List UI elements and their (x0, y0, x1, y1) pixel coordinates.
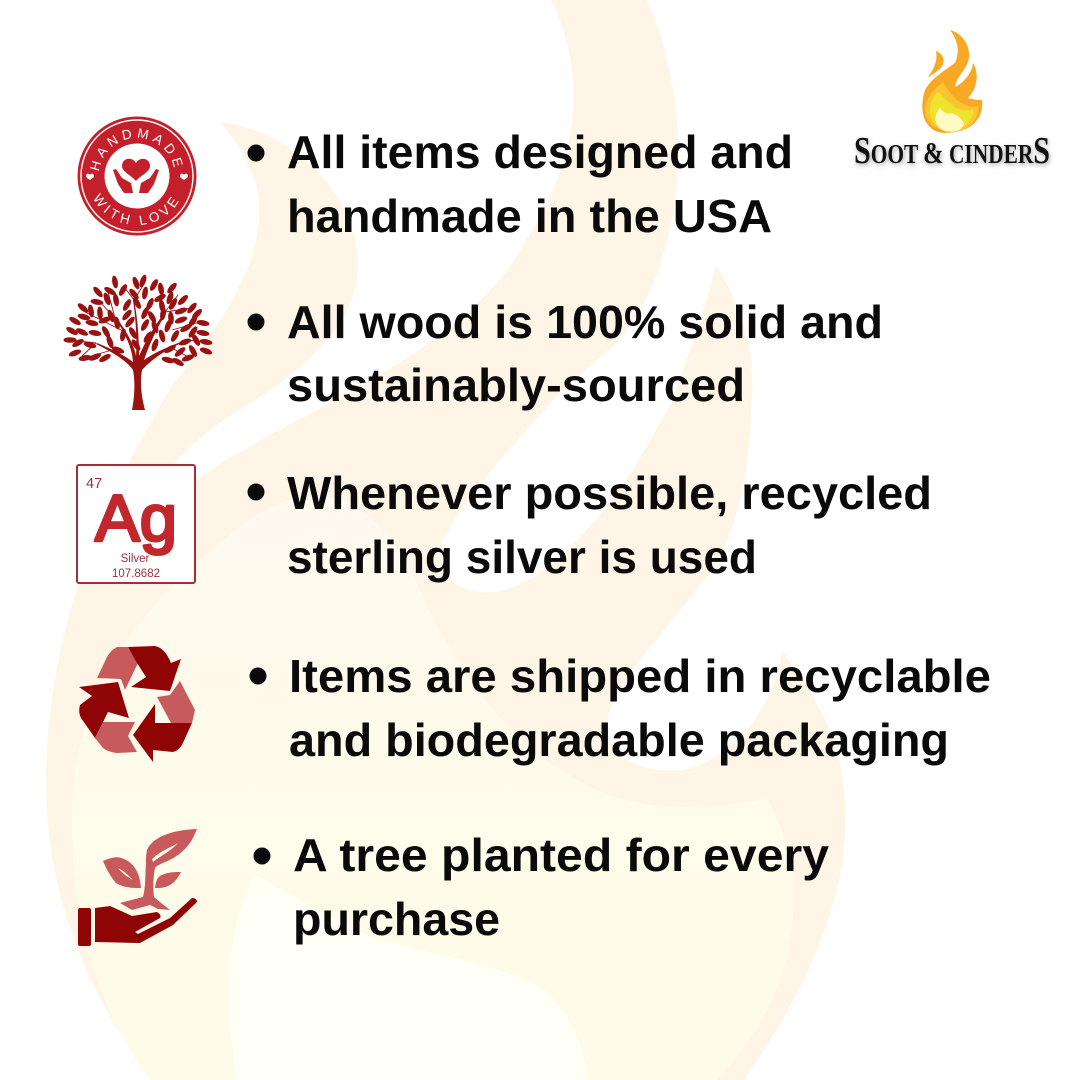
logo wordmark: SOOT & CINDERS (854, 130, 1050, 172)
bullet: handmade in USA: handmade in the USA (287, 190, 772, 242)
bullet: tree planted: purchase (293, 893, 500, 945)
bullet: handmade in USA (248, 126, 793, 242)
bullet: recyclable packaging: Items are shipped in recyclable (289, 650, 991, 702)
background flame (46, 0, 845, 1080)
bullet: recyclable packaging: and biodegradable packaging (289, 714, 949, 766)
icon: handmade with love badge: WITH LOVE (94, 192, 179, 225)
bullet: recycled sterling silver: Whenever possible, recycled (287, 467, 932, 519)
bullet: solid sustainable wood: All wood is 100% solid and (287, 296, 883, 348)
icon: tree (64, 274, 213, 410)
icon: logo flame (922, 30, 982, 133)
bullet: recycled sterling silver (248, 467, 932, 583)
bullet: solid sustainable wood (248, 296, 883, 411)
icon: silver periodic table tile (77, 465, 195, 583)
icon: handmade with love badge (78, 116, 196, 236)
icon: silver periodic table tile: Silver (121, 553, 150, 565)
icon: handmade with love badge: HANDMADE (90, 128, 183, 171)
logo: Soot and Cinders (854, 30, 1050, 172)
bullet: recycled sterling silver: sterling silver is used (287, 531, 757, 583)
icon: silver periodic table tile: 47 (86, 476, 102, 492)
icon: recycling arrows (79, 646, 195, 762)
bullet: solid sustainable wood: sustainably-sourced (287, 359, 745, 411)
icon: silver periodic table tile: 107.8682 (112, 568, 160, 580)
icon: hand holding seedling (78, 829, 197, 946)
bullet: handmade in USA: All items designed and (287, 126, 793, 178)
icon: silver periodic table tile: Ag (95, 481, 177, 555)
bullet: recyclable packaging (250, 650, 991, 766)
bullet: tree planted (254, 829, 829, 945)
bullet: tree planted: A tree planted for every (293, 829, 829, 881)
